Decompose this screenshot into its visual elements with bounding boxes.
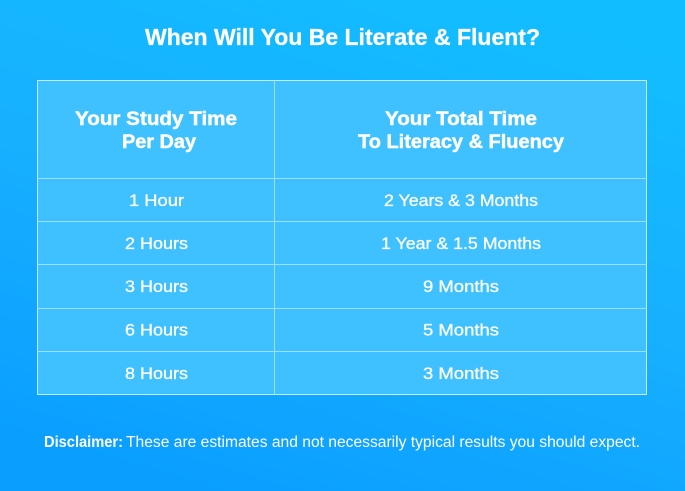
row: 1 hour: 2 Years & 3 Months [384,192,538,210]
row: 2 hours [125,235,541,253]
header: total time: Your Total Time [385,109,537,130]
row: 2 hours: 2 Hours [125,235,188,253]
disclaimer: These are estimates and not necessarily typical results you should expect. [126,434,640,451]
row: 1 hour: 1 Hour [129,192,185,210]
table [38,80,646,394]
row: 6 hours: 5 Months [423,322,499,340]
header: study time: Per Day [122,132,196,153]
row: 8 hours [125,365,499,383]
header: total time: To Literacy & Fluency [358,132,564,153]
header: total time [358,109,564,153]
title: When Will You Be Literate & Fluent? [145,24,540,50]
table background [38,80,646,394]
row: 3 hours: 3 Hours [125,278,188,296]
disclaimer: Disclaimer: [44,434,123,451]
row: 6 hours: 6 Hours [125,322,188,340]
row: 3 hours: 9 Months [423,278,499,296]
header: study time [75,109,237,153]
row: 2 hours: 1 Year & 1.5 Months [381,235,541,253]
header: study time: Your Study Time [75,109,237,130]
row: 1 hour [129,192,538,210]
row: 8 hours: 8 Hours [125,365,188,383]
row: 8 hours: 3 Months [423,365,499,383]
row: 3 hours [125,278,499,296]
row: 6 hours [125,322,499,340]
